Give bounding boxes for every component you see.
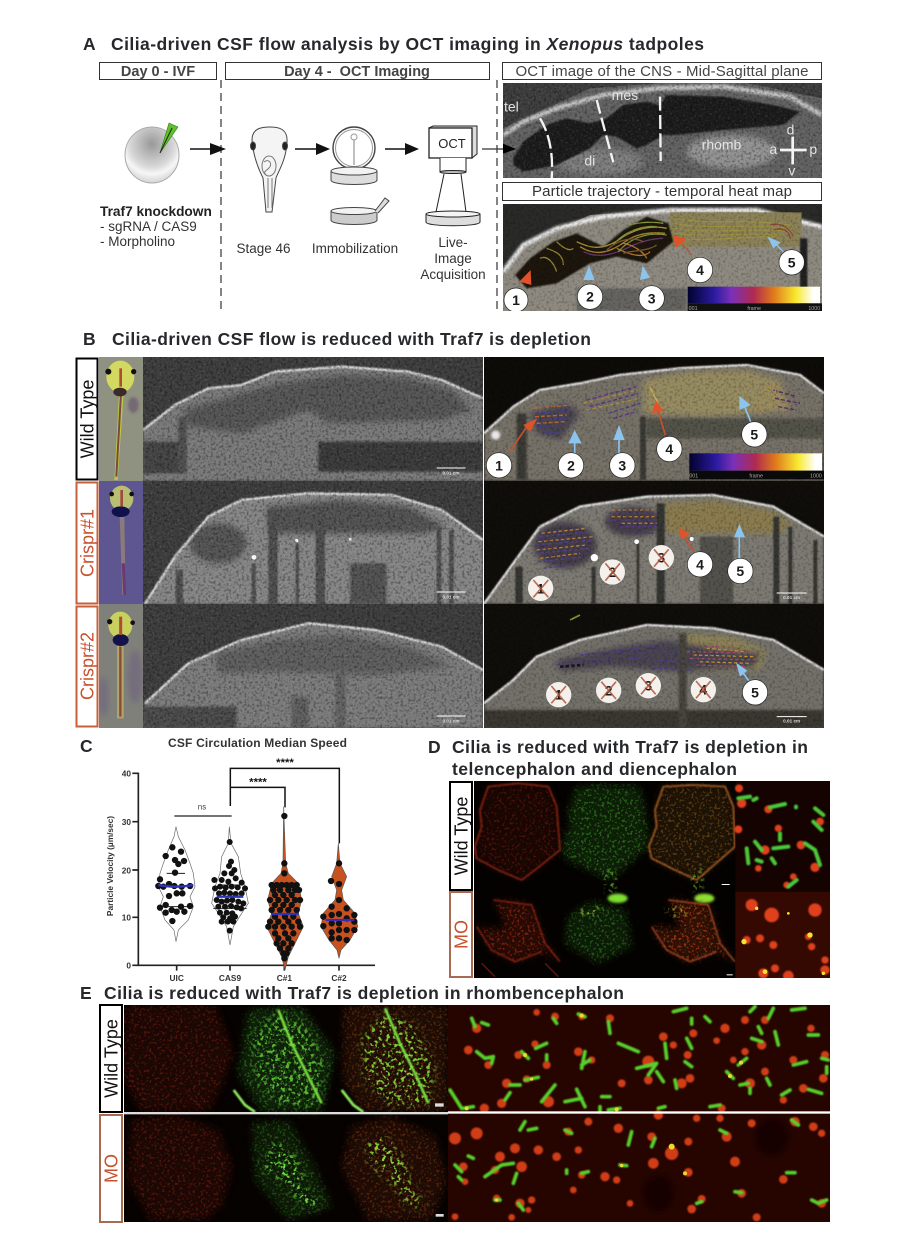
panel letter B: B xyxy=(83,329,96,349)
image: OCT mid-sagittal: p xyxy=(809,141,817,157)
heat map: Crispr#1: 0.01 cm xyxy=(783,595,800,600)
heading D: telencephalon and diencephalon xyxy=(452,759,737,779)
tick labels: 20 xyxy=(122,865,131,875)
yellow highlights xyxy=(465,1014,743,1202)
violin chart xyxy=(105,757,375,983)
row label: MO: MO xyxy=(452,920,472,949)
heat map: Crispr#2 xyxy=(484,604,824,728)
chart title: CSF Circulation Median Speed xyxy=(168,736,347,750)
image: OCT mid-sagittal: v xyxy=(788,163,795,179)
significance: **** bracket C#2 xyxy=(230,757,339,843)
category labels: C#2 xyxy=(331,973,347,983)
icon: stage 46 tadpole sketch xyxy=(250,127,288,212)
column: green channel xyxy=(562,785,648,963)
heat map: wild type: 001 xyxy=(689,474,698,480)
row label: MO: MO xyxy=(102,1154,122,1183)
heat map: Crispr#1: 3 xyxy=(657,550,665,566)
row label: wild type: Wild Type xyxy=(452,797,472,875)
category labels: C#1 xyxy=(277,973,292,983)
heat map: Crispr#1: 5 xyxy=(736,563,744,579)
violin: CAS9 xyxy=(212,827,248,945)
heading E: Cilia is reduced with Traf7 is depletion in rhombencephalon xyxy=(104,983,624,1003)
heat map: Crispr#2: 2 xyxy=(605,682,613,698)
violin: UIC xyxy=(158,827,195,942)
significance: **** bracket C#1: **** xyxy=(249,776,267,788)
row label: wild type: Wild Type xyxy=(102,1019,122,1098)
row label: wild type: Wild Type xyxy=(78,380,98,458)
image: particle trajectory heat map: 2 xyxy=(586,289,594,305)
arrow: immobilization to OCT xyxy=(385,143,419,155)
heat map: Crispr#1: 1 xyxy=(537,580,545,596)
heat map: Crispr#1: 4 xyxy=(696,556,704,572)
green cilia xyxy=(450,1007,828,1210)
text: Traf7 knockdown: - Morpholino xyxy=(100,234,175,249)
image: OCT mid-sagittal xyxy=(503,83,822,179)
OCT scan: Crispr#2: 0.01 cm xyxy=(442,719,460,724)
y axis label: Particle Velocity (µm/sec) xyxy=(105,816,115,916)
image: OCT mid-sagittal: tel xyxy=(504,99,519,115)
panel A: OCT workflow xyxy=(83,34,822,312)
violin: C#1 xyxy=(267,807,303,970)
column: red channel xyxy=(475,783,560,977)
axes xyxy=(132,773,375,971)
panel D: telencephalon cilia imaging xyxy=(428,737,830,981)
image: particle trajectory heat map: 3 xyxy=(648,290,656,306)
significance: **** bracket C#1 xyxy=(230,776,285,807)
violin: C#2 xyxy=(321,843,358,958)
dashed divider right xyxy=(496,80,498,310)
column: merged channels xyxy=(649,785,735,975)
heat map: wild type xyxy=(484,357,824,481)
image: particle trajectory heat map: 001 xyxy=(689,306,698,312)
row label: Crispr#1 xyxy=(76,482,98,604)
significance: ns: ns xyxy=(198,802,206,811)
heat map: wild type: 4 xyxy=(665,441,673,457)
label: live-image acquisition: Acquisition xyxy=(420,267,486,282)
OCT scan: wild type xyxy=(143,357,483,481)
confocal images: rhombencephalon overview xyxy=(124,1005,448,1222)
heat map: wild type: 3 xyxy=(618,457,626,473)
box: OCT image heading: OCT image of the CNS - Mid-Sagittal plane xyxy=(516,63,808,80)
column: red channel xyxy=(124,1005,233,1221)
heat map: Crispr#2: 1 xyxy=(555,687,563,703)
significance: ns xyxy=(174,802,232,816)
arrow: tadpole to immobilization xyxy=(295,143,330,155)
text: Traf7 knockdown xyxy=(100,204,212,249)
divider xyxy=(448,1111,830,1114)
heat map: Crispr#2: 5 xyxy=(751,684,759,700)
heat map: wild type: frame xyxy=(749,474,763,480)
row label: MO xyxy=(450,892,472,977)
confocal images: telencephalon xyxy=(474,781,830,978)
box: particle trajectory heading: Particle trajectory - temporal heat map xyxy=(532,183,792,200)
heat map: wild type: 1 xyxy=(495,457,503,473)
image: particle trajectory heat map: 5 xyxy=(788,254,796,270)
image: particle trajectory heat map: 1 xyxy=(512,292,520,308)
heading B: Cilia-driven CSF flow is reduced with Traf7 is depletion xyxy=(112,329,591,349)
OCT scan: wild type: 0.01 cm xyxy=(442,471,460,476)
heat map: Crispr#2: 4 xyxy=(699,682,707,698)
icon: OCT scanner xyxy=(426,126,480,226)
text: Traf7 knockdown: - sgRNA / CAS9 xyxy=(100,219,197,234)
row label: wild type xyxy=(450,782,472,890)
label: live-image acquisition: Image xyxy=(434,251,472,266)
OCT scan: Crispr#1 xyxy=(143,481,483,604)
panel letter D: D xyxy=(428,737,441,757)
row label: wild type xyxy=(100,1005,122,1112)
image: OCT mid-sagittal: a xyxy=(769,141,777,157)
row label: MO xyxy=(100,1115,122,1222)
OCT scan: Crispr#1: 0.01 cm xyxy=(442,595,460,600)
row label: Crispr#2: Crispr#2 xyxy=(78,632,98,700)
heat map: wild type: 1000 xyxy=(810,474,822,480)
box: Day 4 - OCT Imaging: Day 4 - OCT Imaging xyxy=(284,64,430,80)
tick labels: 40 xyxy=(122,769,131,779)
heading A: Cilia-driven CSF flow analysis by OCT imaging in Xenopus tadpoles xyxy=(111,34,704,54)
panel E: rhombencephalon cilia imaging xyxy=(80,983,830,1222)
panel C: violin chart xyxy=(80,736,375,983)
red nuclei xyxy=(449,1009,829,1221)
label: live-image acquisition xyxy=(420,235,486,282)
confocal image: zoomed cilia rhombencephalon xyxy=(448,1005,830,1222)
image: particle trajectory heat map: 1000 xyxy=(808,306,820,312)
image: OCT mid-sagittal: rhomb xyxy=(702,136,742,152)
significance: **** bracket C#2: **** xyxy=(276,757,294,769)
icon: OCT scanner: OCT xyxy=(438,136,466,151)
column: merged channels xyxy=(342,1005,448,1221)
heat map: Crispr#1 xyxy=(484,481,824,604)
column: zoomed cilia xyxy=(734,781,830,981)
heading D xyxy=(452,737,808,779)
image: OCT mid-sagittal: d xyxy=(787,121,794,137)
row label: Crispr#2 xyxy=(76,606,98,726)
tick labels: 0 xyxy=(126,961,131,971)
tick labels: 30 xyxy=(122,817,131,827)
heat map: Crispr#2: 0.01 cm xyxy=(783,719,800,724)
row label: Crispr#1: Crispr#1 xyxy=(78,509,98,577)
column: green channel xyxy=(234,1007,335,1221)
heat map: Crispr#1: 2 xyxy=(608,564,616,580)
photo: tadpole wild type xyxy=(99,357,143,481)
dashed divider left xyxy=(220,80,222,310)
tick labels: 10 xyxy=(122,913,131,923)
box: Day 0 - IVF xyxy=(100,62,216,80)
arrow: egg to tadpole xyxy=(190,143,226,155)
panel B: CSF flow by genotype xyxy=(76,329,824,728)
label: live-image acquisition: Live- xyxy=(438,235,468,250)
box: Day 4 - OCT Imaging xyxy=(226,62,490,80)
image: OCT mid-sagittal: di xyxy=(584,153,595,169)
heading D: Cilia is reduced with Traf7 is depletion in xyxy=(452,737,808,757)
category labels: UIC xyxy=(169,973,184,983)
panel letter E: E xyxy=(80,983,92,1003)
heat map: wild type: 5 xyxy=(750,426,758,442)
arrow: OCT to image xyxy=(482,148,506,150)
box: Day 0 - IVF: Day 0 - IVF xyxy=(121,64,195,80)
label: stage 46: Stage 46 xyxy=(236,241,291,256)
image: particle trajectory heat map: frame xyxy=(747,306,761,312)
category labels: CAS9 xyxy=(219,973,241,983)
icon: petri dishes with embryo xyxy=(331,127,389,224)
heat map: Crispr#2: 3 xyxy=(644,678,652,694)
photo: tadpole Crispr#1 xyxy=(99,481,143,604)
image: OCT mid-sagittal: mes xyxy=(612,87,638,103)
panel letter A: A xyxy=(83,34,96,54)
panel letter C: C xyxy=(80,736,93,756)
OCT scan: Crispr#2 xyxy=(143,604,483,728)
icon: injected egg with needle xyxy=(125,123,179,183)
heat map: wild type: 2 xyxy=(567,457,575,473)
text: Traf7 knockdown: Traf7 knockdown xyxy=(100,204,212,219)
tick labels xyxy=(122,769,131,971)
category labels xyxy=(169,973,347,983)
image: particle trajectory heat map xyxy=(503,204,822,312)
photo: tadpole Crispr#2 xyxy=(99,604,143,728)
label: immobilization: Immobilization xyxy=(312,241,398,256)
row label: wild type xyxy=(76,358,98,480)
image: particle trajectory heat map: 4 xyxy=(696,262,704,278)
